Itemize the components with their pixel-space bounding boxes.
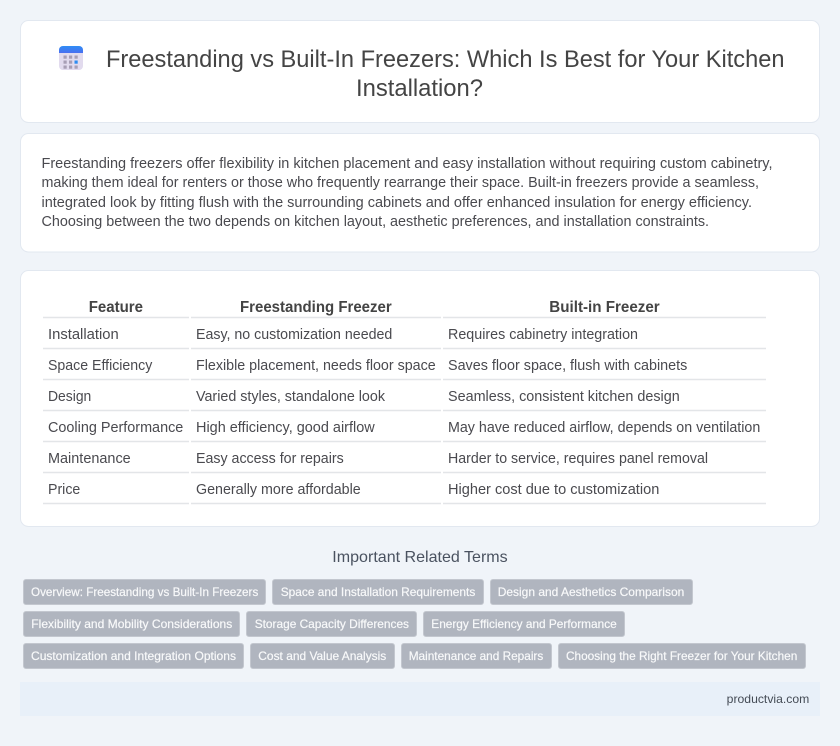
table row: Price: Higher cost due to customization bbox=[448, 482, 659, 498]
tag: Flexibility and Mobility bbox=[24, 612, 240, 636]
tag: Storage Capacity bbox=[246, 612, 416, 636]
table row: Price: Price bbox=[48, 482, 80, 498]
table row: Space Efficiency: Space Efficiency bbox=[48, 358, 153, 374]
table header: Feature bbox=[89, 299, 143, 316]
tag: Customization: Customization and Integration Options bbox=[31, 649, 236, 663]
table row: Installation: Requires cabinetry integration bbox=[448, 327, 638, 343]
tag: Choosing the Right Freezer: Choosing the Right Freezer for Your Kitchen bbox=[566, 649, 797, 663]
table row: Space Efficiency: Saves floor space, flush with cabinets bbox=[448, 358, 687, 374]
panel: comparison table card bbox=[20, 270, 820, 526]
title: Installation? bbox=[356, 75, 483, 102]
tag: Customization bbox=[24, 644, 244, 668]
table row: Design bbox=[43, 389, 766, 410]
table row: Price bbox=[43, 482, 766, 504]
table row: Design: Design bbox=[48, 389, 91, 405]
table row: Cooling Performance: High efficiency, good airflow bbox=[196, 420, 375, 436]
tag: Design and Aesthetics: Design and Aesthetics Comparison bbox=[498, 585, 684, 599]
table row: Installation: Easy, no customization needed bbox=[196, 327, 392, 343]
title: Freestanding vs Built-In Freezers: Which Is Best for Your Kitchen bbox=[106, 46, 784, 73]
table row: Maintenance: Easy access for repairs bbox=[196, 451, 344, 467]
table header: Freestanding Freezer bbox=[240, 299, 392, 316]
icon: calendar bbox=[59, 46, 83, 70]
tag: Maintenance and Repairs: Maintenance and Repairs bbox=[409, 649, 543, 663]
table row: Price: Generally more affordable bbox=[196, 482, 361, 498]
footer bar bbox=[20, 682, 820, 716]
tag: Overview: Overview: Freestanding vs Built-In Freezers bbox=[31, 585, 258, 599]
table row: Maintenance: Harder to service, requires panel removal bbox=[448, 451, 708, 467]
tag: Energy Efficiency: Energy Efficiency and Performance bbox=[431, 617, 617, 631]
tag: Overview bbox=[24, 580, 266, 604]
title bbox=[106, 46, 784, 102]
panel: summary card bbox=[20, 134, 820, 252]
table header bbox=[43, 299, 766, 318]
tag: Maintenance and Repairs bbox=[402, 644, 552, 668]
table row: Installation: Installation bbox=[48, 327, 119, 343]
table row: Space Efficiency bbox=[43, 358, 766, 380]
table row: Cooling Performance: Cooling Performance bbox=[48, 420, 183, 436]
table row: Design: Seamless, consistent kitchen design bbox=[448, 389, 680, 405]
footer source text: productvia.com bbox=[727, 692, 809, 706]
tag: Cost and Value: Cost and Value Analysis bbox=[258, 649, 386, 663]
table row: Design: Varied styles, standalone look bbox=[196, 389, 386, 405]
tag: Space and Installation: Space and Installation Requirements bbox=[281, 585, 475, 599]
tag: Choosing the Right Freezer bbox=[558, 644, 806, 668]
tag: Design and Aesthetics bbox=[490, 580, 692, 604]
summary paragraph bbox=[42, 156, 772, 230]
tag: Cost and Value bbox=[250, 644, 394, 668]
table row: Maintenance bbox=[43, 451, 766, 472]
table row: Cooling Performance bbox=[43, 420, 766, 442]
table row: Space Efficiency: Flexible placement, needs floor space bbox=[196, 358, 436, 374]
table row: Cooling Performance: May have reduced airflow, depends on ventilation bbox=[448, 420, 760, 436]
summary paragraph: Freestanding freezers offer flexibility in kitchen placement and easy installation without requiring custom cabinetry, bbox=[42, 156, 772, 172]
summary paragraph: making them ideal for renters or those who frequently rearrange their space. Built-in freezers provide a seamless, bbox=[42, 175, 759, 191]
tag: Energy Efficiency bbox=[424, 612, 624, 636]
tag: Flexibility and Mobility: Flexibility and Mobility Considerations bbox=[31, 617, 232, 631]
table row: Maintenance: Maintenance bbox=[48, 451, 131, 467]
summary paragraph: Choosing between the two depends on kitchen layout, aesthetic preferences, and installation constraints. bbox=[42, 214, 709, 230]
table row: Installation bbox=[43, 327, 766, 348]
panel: title card bbox=[20, 20, 820, 122]
tag: Space and Installation bbox=[272, 580, 484, 604]
table header: Built-in Freezer bbox=[549, 299, 660, 316]
summary paragraph: integrated look by fitting flush with the surrounding cabinets and offer enhanced insulation for energy efficiency. bbox=[42, 195, 752, 211]
tag: Storage Capacity: Storage Capacity Differences bbox=[255, 617, 409, 631]
heading: related terms: Important Related Terms bbox=[332, 549, 508, 566]
